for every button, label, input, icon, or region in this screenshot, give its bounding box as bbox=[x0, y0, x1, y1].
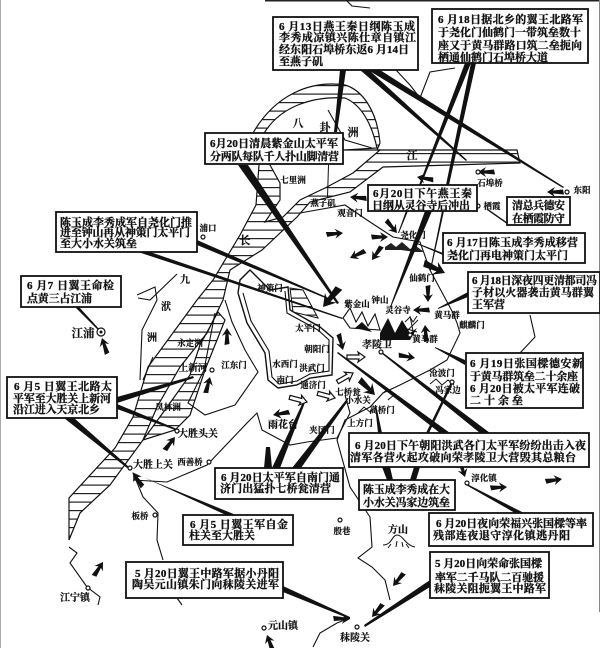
callout: Chen Yucheng advance bbox=[56, 212, 197, 252]
map place labels: 秣陵关 bbox=[340, 631, 370, 644]
callout: June 17 bbox=[443, 233, 585, 263]
callout: June 20 south gate bbox=[215, 468, 343, 499]
map place labels: 栖霞 bbox=[483, 201, 501, 211]
map place labels: 元山镇 bbox=[268, 619, 300, 632]
callout: June 5 Dasheng Guan: 6 月5 日翼王军自金 bbox=[190, 517, 288, 531]
map place labels bbox=[60, 117, 591, 644]
callout: May 20 Xiang Rong: 5 月20日向荣命张国樑 bbox=[435, 556, 543, 570]
callout: June 13 Yan Wang: 至燕子矶 bbox=[279, 54, 323, 68]
callout: June 19 and 20: 6 月20日被太平军连破 bbox=[470, 381, 580, 395]
river band: Yangtze main channel bbox=[69, 84, 520, 540]
mountains: Zijin Shan range bbox=[343, 242, 454, 413]
map place labels: 江 bbox=[406, 149, 418, 162]
callout: Xiaoshui Guan: 小水关冯家边筑垒 bbox=[363, 495, 451, 509]
callout: June 18 Beixiang: 6 月18日据北乡的翼王北路军 bbox=[438, 12, 583, 26]
callout: June 5 north route: 平军至大胜关上新河 bbox=[13, 391, 111, 405]
callout: June 7 Jiangpu: 6 月7 日翼王命检 bbox=[27, 278, 114, 292]
map place labels: 长 bbox=[240, 233, 250, 247]
map place labels: 浦口 bbox=[199, 223, 217, 233]
callout: May 20 Xiang Rong: 秣陵关阻扼翼王中路军 bbox=[434, 581, 546, 595]
callout: May 20 central route bbox=[126, 562, 283, 598]
map place labels: 凤林洲 bbox=[155, 402, 181, 412]
map place labels: 西善桥 bbox=[177, 457, 203, 467]
callout: June 18 late night: 6 月18日深夜四更清都司冯 bbox=[472, 273, 597, 287]
callout: June 13 Yan Wang: 6 月13日燕王秦日纲陈玉成 bbox=[279, 19, 415, 33]
river band: north moat hatching bbox=[290, 288, 318, 318]
map place labels: 高桥门 bbox=[369, 405, 395, 415]
map place labels: 方山 bbox=[388, 523, 408, 536]
callout: Qixia garrison: 清总兵德安 bbox=[512, 198, 566, 212]
callout: June 5 north route: 6 月5 日翼王北路太 bbox=[14, 379, 112, 393]
callout: June 7 Jiangpu bbox=[21, 276, 121, 307]
callout: Qixia garrison bbox=[507, 197, 570, 225]
map place labels: 冯家边 bbox=[435, 385, 461, 395]
callout: June 5 north route: 沿江进入天京北乡 bbox=[13, 402, 100, 416]
callout: June 13 Yan Wang: 李秀成凉镇兴陈仕章自镇江 bbox=[279, 30, 416, 44]
map place labels: 观音门 bbox=[337, 208, 363, 218]
callout: June 18 late night bbox=[468, 272, 600, 313]
callout: June 19 and 20: 6 月19日张国樑德安新 bbox=[470, 356, 583, 370]
map place labels: 上新河 bbox=[179, 362, 208, 374]
map place labels: 小水关 bbox=[345, 395, 371, 405]
map: river hatching and water bodies bbox=[69, 0, 535, 647]
map place labels: 上方门 bbox=[347, 418, 373, 428]
callout: June 19 and 20: 二十余垒 bbox=[470, 393, 524, 407]
map place labels: 孝陵卫 bbox=[362, 338, 392, 351]
map place labels: 洲 bbox=[348, 125, 358, 139]
callout: June 18 Beixiang: 栖通仙鹤门石埠桥大道 bbox=[438, 50, 548, 64]
river band: Shangxin channel bbox=[143, 312, 225, 440]
callout: Qixia garrison: 在栖霞防守 bbox=[512, 211, 565, 225]
callout: June 13 Yan Wang bbox=[273, 17, 418, 70]
callout: June 20 Linggu Temple bbox=[368, 185, 477, 212]
callout: June 5 north route bbox=[7, 377, 117, 418]
callout: May 20 Xiang Rong bbox=[430, 552, 549, 598]
map place labels: 燕子矶 bbox=[310, 198, 336, 208]
callout: June 20 Zijin Shan: 6月20日清晨紫金山太平军 bbox=[210, 136, 338, 150]
callout: June 20 Zijin Shan bbox=[205, 133, 343, 164]
island: Bagua Zhou bbox=[263, 98, 377, 165]
callout: June 20 night: 6 月20日夜向荣福兴张国樑等率 bbox=[436, 516, 588, 530]
map place labels: 东阳 bbox=[573, 185, 591, 195]
callout: June 5 Dasheng Guan: 柱关至大胜关 bbox=[189, 528, 255, 542]
callout: June 18 Beixiang: 于尧化门仙鹤门一带筑垒数十 bbox=[438, 25, 581, 39]
map place labels: 夹冈门 bbox=[309, 425, 335, 435]
place markers bbox=[86, 170, 569, 630]
callout: June 18 late night: 子材以火器袭击黄马群翼 bbox=[472, 285, 595, 299]
callout: Xiaoshui Guan bbox=[359, 480, 455, 510]
callout: June 20 afternoon: 6 月20日下午朝阳洪武各门太平军纷纷出击入夜 bbox=[355, 438, 586, 452]
map place labels: 江宁镇 bbox=[60, 591, 92, 604]
callout: June 13 Yan Wang: 经东阳石埠桥东返6 月14日 bbox=[279, 42, 409, 56]
map place labels: 麒麟门 bbox=[459, 320, 485, 330]
map place labels: 永定洲 bbox=[177, 338, 203, 348]
map place labels: 板桥 bbox=[131, 511, 149, 521]
map place labels: 黄马群 bbox=[434, 310, 460, 320]
callout: June 20 south gate: 6 月20日太平军自南门通 bbox=[221, 470, 340, 484]
callout: June 20 night: 残部连夜退守淳化镇逃丹阳 bbox=[433, 528, 570, 542]
callout: May 20 central route: 5 月20日翼王中路军据小丹阳 bbox=[135, 566, 279, 580]
callout: June 20 Linggu Temple: 6月20日下午燕王秦 bbox=[373, 186, 472, 200]
city wall bbox=[238, 270, 333, 388]
map place labels: 钟山 bbox=[371, 295, 389, 305]
map place labels: 洪武门 bbox=[299, 363, 325, 373]
callout: June 18 Beixiang bbox=[432, 9, 588, 64]
map place labels: 雨花台 bbox=[268, 418, 299, 431]
callout: Chen Yucheng advance: 进至钟山再从神策门太平门 bbox=[60, 225, 190, 239]
map place labels: 江浦 bbox=[72, 326, 95, 340]
map place labels: 太平门 bbox=[295, 323, 321, 333]
callout: May 20 Xiang Rong: 率军二千马队二百驰援 bbox=[435, 570, 544, 584]
callout: June 20 south gate: 济门出猛扑七桥瓮清营 bbox=[220, 481, 331, 495]
map place labels: 沧波门 bbox=[429, 368, 455, 378]
callout: June 5 Dasheng Guan bbox=[183, 515, 293, 545]
arrows: troop movements bbox=[90, 167, 564, 648]
map place labels: 仙鹤门 bbox=[409, 273, 435, 283]
map place labels: 淳化镇 bbox=[471, 473, 498, 483]
callout: June 18 Beixiang: 座又于黄马群路口筑二垒扼向 bbox=[438, 38, 582, 52]
callout: June 19 and 20: 于黄马群筑垒二十余座 bbox=[470, 369, 579, 383]
callout: June 19 and 20 bbox=[466, 353, 583, 408]
callout: June 17: 6 月17日陈玉成李秀成移营 bbox=[447, 235, 578, 249]
map place labels: 殷巷 bbox=[333, 526, 351, 536]
callout: June 20 Linggu Temple: 日纲从灵谷寺后冲出 bbox=[372, 198, 470, 212]
map place labels: 朝阳门 bbox=[304, 344, 330, 354]
island: Qili Zhou bbox=[265, 150, 380, 222]
map place labels: 尧化门 bbox=[400, 230, 426, 240]
callout: May 20 central route: 陶吴元山镇朱门向秣陵关进军 bbox=[132, 577, 279, 591]
callout: June 20 night bbox=[429, 513, 593, 546]
map place labels: 灵谷寺 bbox=[385, 305, 411, 315]
map place labels: 八 bbox=[292, 117, 304, 130]
map place labels: 大胜上关 bbox=[133, 458, 173, 471]
map place labels: 南门 bbox=[276, 375, 294, 385]
callout: June 7 Jiangpu: 点黄三占江浦 bbox=[27, 291, 92, 305]
callout: June 20 afternoon bbox=[349, 433, 589, 467]
callout: Chen Yucheng advance: 陈玉成李秀成军自尧化门推 bbox=[60, 215, 192, 229]
mountain: Fang Shan bbox=[383, 535, 415, 548]
map place labels: 水西门 bbox=[272, 359, 298, 369]
callout: June 20 Zijin Shan: 分两队每队千人扑山脚清营 bbox=[210, 149, 339, 163]
callout: Chen Yucheng advance: 至大小水关筑垒 bbox=[60, 236, 138, 250]
map place labels: 石埠桥 bbox=[477, 178, 503, 188]
map place labels: 卦 bbox=[320, 120, 332, 134]
map place labels: 神策门 bbox=[257, 283, 283, 293]
leader lines from callouts bbox=[64, 63, 564, 627]
map place labels: 九 bbox=[180, 273, 190, 286]
callout: June 17: 尧化门再电神策门太平门 bbox=[447, 248, 568, 262]
callout: Xiaoshui Guan: 陈玉成李秀成在大 bbox=[363, 482, 450, 496]
map place labels: 通济门 bbox=[300, 380, 326, 390]
map place labels: 黄马群 bbox=[412, 334, 438, 344]
map place labels: 七桥瓮 bbox=[335, 387, 361, 397]
callout: June 20 afternoon: 清军各营火起攻破向荣孝陵卫大营毁其总粮台 bbox=[350, 450, 577, 464]
map place labels: 大胜头关 bbox=[178, 427, 218, 440]
map place labels: 洲 bbox=[147, 331, 157, 344]
map place labels: 紫金山 bbox=[344, 299, 370, 309]
map place labels: 洑 bbox=[161, 300, 172, 313]
map place labels: 七里洲 bbox=[280, 175, 306, 185]
callout: June 18 late night: 王军营 bbox=[472, 297, 505, 311]
map place labels: 江东门 bbox=[221, 360, 247, 370]
